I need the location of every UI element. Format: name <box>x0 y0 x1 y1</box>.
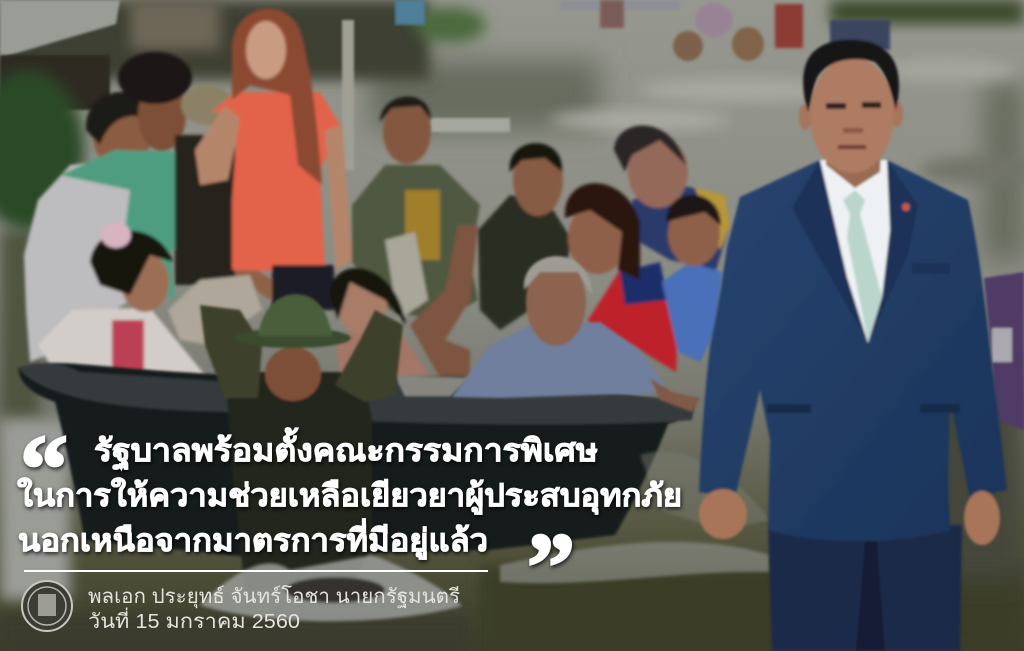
pocket <box>912 263 950 274</box>
man in green shirt <box>60 52 280 300</box>
attribution: พลเอก ประยุทธ์ จันทร์โอชา นายกรัฐมนตรี <box>88 585 460 609</box>
purple sleeve of passenger at right <box>984 272 1024 430</box>
closing quote mark: ” <box>527 513 575 620</box>
headline line 1: รัฐบาลพร้อมตั้งคณะกรรมการพิเศษ <box>94 427 598 471</box>
government seal <box>22 581 72 631</box>
right hand <box>964 491 1000 545</box>
people in the boat <box>24 9 730 382</box>
head <box>810 57 894 173</box>
headline quotation <box>17 415 682 620</box>
woman in orange top <box>195 9 352 310</box>
headline line 3: นอกเหนือจากมาตรการที่มีอยู่แล้ว <box>18 518 488 560</box>
water splash around boat <box>200 452 770 621</box>
tie <box>843 190 882 342</box>
lapel pin <box>902 203 910 211</box>
eyes and mouth <box>826 103 846 109</box>
attribution <box>88 585 460 633</box>
hair <box>803 40 899 112</box>
prime minister standing <box>699 40 1007 651</box>
lapel shadows <box>792 160 868 343</box>
divider line <box>24 570 488 572</box>
shirt collar <box>820 160 890 343</box>
soldier pushing the boat <box>200 294 403 590</box>
boy in blue shirt <box>662 195 722 362</box>
bundle of belongings <box>168 275 262 345</box>
man in white shirt <box>24 92 153 362</box>
boy in black shirt <box>478 143 572 330</box>
ears <box>799 104 811 130</box>
woman in red jacket <box>565 183 678 372</box>
middle woman in dark hair <box>330 268 430 378</box>
background: shore and houses <box>0 0 1024 230</box>
attribution: วันที่ 15 มกราคม 2560 <box>88 607 300 633</box>
elderly woman with glasses <box>614 126 730 270</box>
girl seated at left <box>38 222 205 382</box>
distant people in boat <box>560 0 890 61</box>
neck <box>825 135 882 188</box>
opening quote mark: “ <box>20 415 68 522</box>
tub boat <box>18 363 695 556</box>
suit jacket <box>699 160 1007 541</box>
trousers <box>768 525 962 651</box>
headline line 2: ในการให้ความช่วยเหลือเยียวยาผู้ประสบอุทกภัย <box>17 477 682 515</box>
left hand <box>699 489 747 539</box>
teen in camouflage shirt <box>352 97 480 378</box>
elderly man in plaid shirt <box>452 256 700 412</box>
